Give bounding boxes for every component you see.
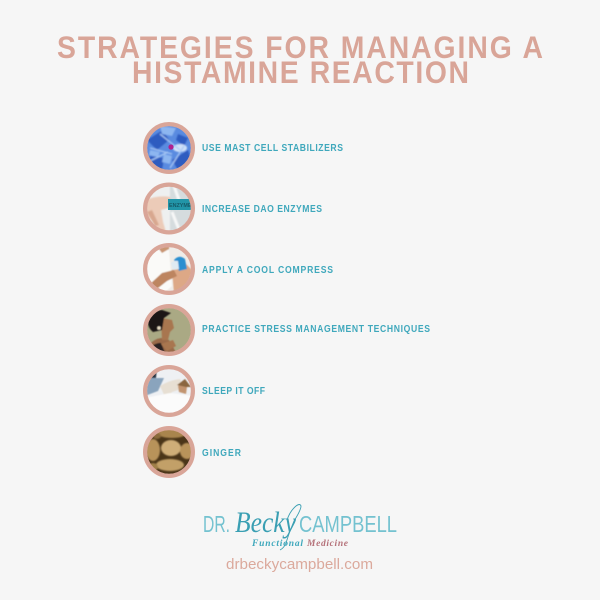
label: INCREASE DAO ENZYMES bbox=[202, 204, 322, 214]
icon: woman breathing calmly bbox=[145, 306, 193, 355]
list item: stress management bbox=[145, 306, 430, 355]
title: STRATEGIES FOR MANAGING A bbox=[57, 31, 543, 65]
list item: ginger bbox=[145, 428, 241, 476]
logo: Dr. Becky Campbell Functional Medicine: Functional bbox=[251, 539, 303, 549]
title: HISTAMINE REACTION bbox=[132, 56, 469, 90]
label: USE MAST CELL STABILIZERS bbox=[202, 143, 343, 153]
list item: cool compress bbox=[145, 245, 333, 293]
icon: person applying compress bbox=[145, 245, 193, 293]
title bbox=[57, 31, 543, 90]
label: APPLY A COOL COMPRESS bbox=[202, 265, 333, 275]
icon: ginger root bbox=[145, 428, 194, 476]
icon: woman sleeping in bed bbox=[145, 367, 193, 415]
label: GINGER bbox=[202, 448, 241, 458]
logo: Dr. Becky Campbell Functional Medicine: Medicine bbox=[306, 539, 349, 549]
label: PRACTICE STRESS MANAGEMENT TECHNIQUES bbox=[202, 324, 430, 334]
logo: Dr. Becky Campbell Functional Medicine bbox=[203, 504, 397, 550]
logo: Dr. Becky Campbell Functional Medicine: Becky bbox=[235, 506, 297, 539]
label: SLEEP IT OFF bbox=[202, 386, 265, 396]
icon: mast cell micrograph bbox=[145, 124, 193, 172]
list item: DAO enzymes bbox=[145, 185, 322, 233]
logo: Dr. Becky Campbell Functional Medicine: DR. bbox=[203, 511, 230, 537]
logo: Dr. Becky Campbell Functional Medicine: CAMPBELL bbox=[299, 511, 397, 537]
list item: mast cell stabilizers bbox=[145, 124, 343, 172]
list item: sleep bbox=[145, 367, 265, 415]
website url: drbeckycampbell.com bbox=[226, 557, 373, 573]
icon: hand holding enzymes packet bbox=[145, 185, 195, 233]
icon: hand holding enzymes packet: ENZYMES bbox=[169, 203, 195, 209]
